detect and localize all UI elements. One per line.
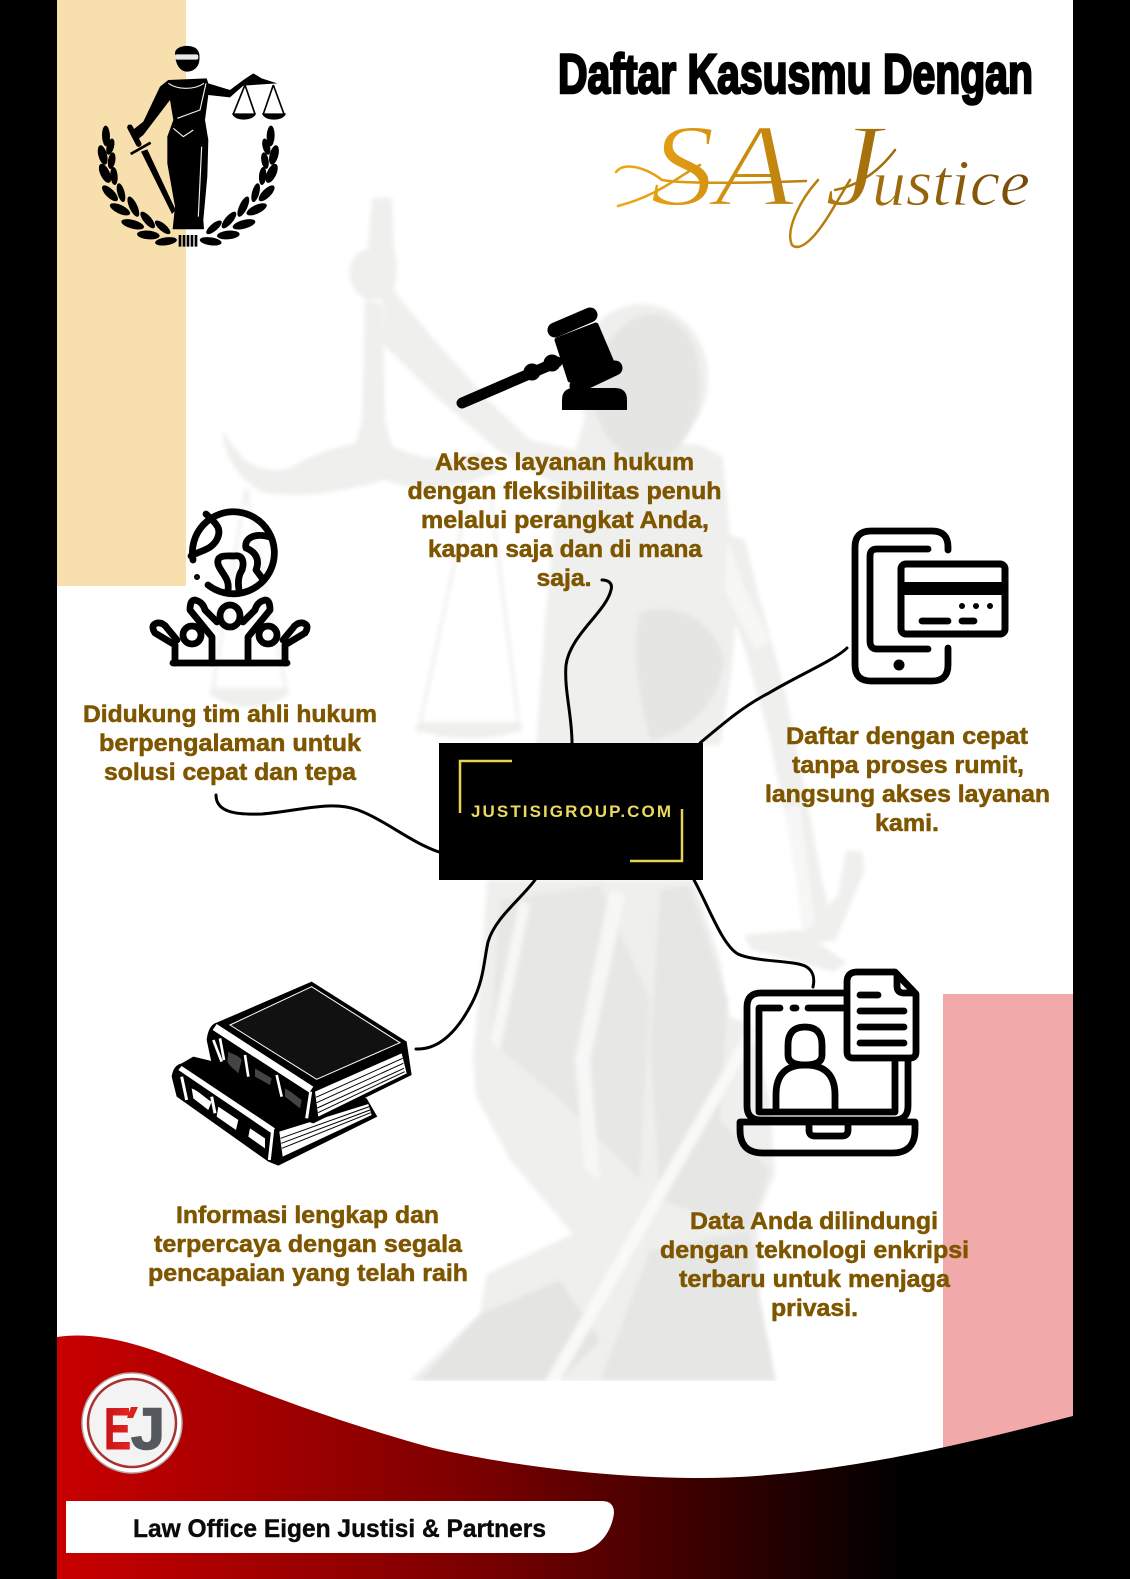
- text: quick registration: langsung akses layanan: [765, 781, 1050, 808]
- text: complete information: pencapaian yang telah raih: [148, 1260, 468, 1287]
- logo: EJ emblem: [82, 1373, 182, 1473]
- text: experienced team: solusi cepat dan tepa: [104, 759, 357, 786]
- text: flexible access: Akses layanan hukum: [435, 449, 694, 476]
- text: quick registration: [765, 723, 1050, 837]
- footer wave: [57, 1335, 1073, 1579]
- text: quick registration: Daftar dengan cepat: [786, 723, 1028, 750]
- text: data protection: privasi.: [771, 1295, 858, 1322]
- logo: EJ emblem: E: [104, 1397, 131, 1462]
- script brand: SA Justice: SA J: [650, 100, 887, 231]
- connector: books to centre box: [416, 880, 535, 1049]
- connector: payment icon to centre box: [700, 648, 847, 743]
- logo: Lady Justice with laurel wreath: [96, 46, 286, 247]
- centre box: JUSTISIGROUP.COM: [439, 743, 703, 880]
- connector: gavel text to centre box: [566, 580, 611, 743]
- script brand: SA Justice: ustice: [872, 147, 1030, 220]
- text: experienced team: [83, 701, 377, 786]
- footer label: [66, 1501, 614, 1553]
- centre box: JUSTISIGROUP.COM: JUSTISIGROUP.COM: [471, 802, 671, 821]
- footer label: Law Office Eigen Justisi & Partners: [133, 1515, 546, 1543]
- icon: gavel: [462, 315, 627, 410]
- text: quick registration: tanpa proses rumit,: [792, 752, 1024, 779]
- text: data protection: dengan teknologi enkripsi: [660, 1237, 969, 1264]
- text: flexible access: melalui perangkat Anda,: [421, 507, 709, 534]
- background statue of Lady Justice: [208, 198, 865, 1381]
- logo: EJ emblem: J: [131, 1397, 165, 1462]
- text: experienced team: Didukung tim ahli hukum: [83, 701, 377, 728]
- text: flexible access: dengan fleksibilitas penuh: [408, 478, 722, 505]
- text: data protection: terbaru untuk menjaga: [679, 1266, 951, 1293]
- text: flexible access: saja.: [536, 565, 592, 592]
- text: complete information: Informasi lengkap dan: [176, 1202, 439, 1229]
- connector: laptop to centre box: [694, 880, 814, 987]
- text: data protection: [660, 1208, 969, 1322]
- panel: pink accent: [943, 994, 1073, 1464]
- text: flexible access: [408, 449, 722, 592]
- text: experienced team: berpengalaman untuk: [99, 730, 362, 757]
- connector: team text to centre box: [216, 795, 439, 852]
- text: complete information: [148, 1202, 468, 1287]
- icon: globe held by people: [153, 512, 307, 663]
- text: data protection: Data Anda dilindungi: [690, 1208, 938, 1235]
- icon: laptop with profile and document: [740, 972, 916, 1153]
- icon: stacked books: [172, 982, 412, 1166]
- text: complete information: terpercaya dengan segala: [154, 1231, 463, 1258]
- text: quick registration: kami.: [875, 810, 939, 837]
- icon: phone with credit card: [855, 531, 1005, 681]
- panel: sand accent: [57, 0, 186, 586]
- text: flexible access: kapan saja dan di mana: [428, 536, 703, 563]
- script brand: SA Justice: [616, 100, 1030, 247]
